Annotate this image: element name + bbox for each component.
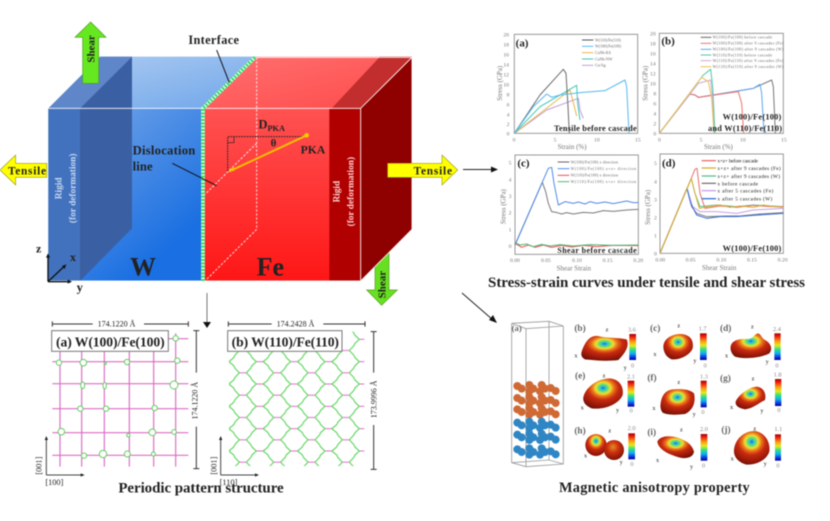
legend (a): Cu/Ag xyxy=(595,63,606,68)
anisotropy plot (b): (b) xyxy=(574,323,586,334)
legend (b): W(100)/Fe(100) after 9 cascades (Fe) xyxy=(713,41,784,46)
legend (b): W(110)/Fe(110) after 9 cascades (Fe) xyxy=(713,58,784,63)
pattern (b) W(110)/Fe(110) xyxy=(229,332,364,466)
anisotropy plot (j): x xyxy=(731,456,735,463)
arrow: tensile left: Tensile xyxy=(8,165,46,177)
anisotropy plot (d): 2.4 xyxy=(773,326,782,333)
annotation (b): W(100)/Fe(100) xyxy=(723,113,782,122)
panel label a: (a) xyxy=(512,323,522,333)
anisotropy plot (e): 2.1 xyxy=(627,373,635,380)
rigid label Fe: (for deformation) xyxy=(345,157,356,226)
curves (d) xyxy=(660,168,783,253)
tick labels (b): 14 xyxy=(650,61,656,67)
tick labels (b): 2 xyxy=(653,121,656,127)
anisotropy plot (b) xyxy=(574,323,636,371)
tick labels (a): 14 xyxy=(503,62,509,68)
panel label (d): (d) xyxy=(662,158,676,170)
label box (a): (a) W(100)/Fe(100) xyxy=(56,334,165,350)
tick labels (c): 0.10 xyxy=(572,258,582,264)
anisotropy plot (i): 2.0 xyxy=(700,426,708,433)
legend (c): W(100)/Fe(100) x+z+ direction xyxy=(571,166,636,171)
anisotropy plot (e): z xyxy=(603,372,606,379)
dimension top (b): 174.2428 Å xyxy=(277,319,315,328)
heading: magnetic anisotropy property: Magnetic anisotropy property xyxy=(559,480,750,496)
arrow: shear down: Shear xyxy=(376,271,388,298)
annotation (a): Tensile before cascade xyxy=(554,124,637,133)
x title (b): Strain (%) xyxy=(704,143,734,151)
dimension side (a) xyxy=(191,331,200,469)
pattern (a) W(100)/Fe(100) xyxy=(52,333,188,467)
anisotropy plot (b): 3.6 xyxy=(628,327,636,334)
anisotropy plot (d): 0 xyxy=(775,362,779,369)
anisotropy plot (h): 0 xyxy=(630,461,634,468)
arrow: to magnetic anisotropy xyxy=(462,293,497,323)
tick labels (b) xyxy=(650,31,787,143)
tick labels (a): 12 xyxy=(503,72,509,78)
anisotropy plot (d): x xyxy=(725,352,729,359)
annotation (b): and W(110)/Fe(110) xyxy=(708,124,782,133)
panel label (a): (a) xyxy=(516,38,529,50)
rigid label W: Rigid xyxy=(54,177,64,199)
orientation axes (a) xyxy=(35,436,85,487)
arrow: tensile left xyxy=(0,155,47,185)
axes xyz: y xyxy=(77,281,84,295)
axes xyz: x xyxy=(70,250,76,264)
anisotropy plot (h) xyxy=(574,425,636,468)
anisotropy plot (f): 0 xyxy=(701,409,705,416)
anisotropy plot (h): (h) xyxy=(574,425,586,436)
tick labels (a): 0 xyxy=(507,131,510,137)
panel: W/Fe bicrystal model xyxy=(0,22,458,305)
annotation (d): W(100)/Fe(100) xyxy=(723,244,782,253)
anisotropy plot (e): 0 xyxy=(630,408,633,415)
tick labels (c) xyxy=(509,160,643,264)
panel: periodic pattern structure xyxy=(35,319,379,497)
tick labels (a): 16 xyxy=(503,52,509,58)
orientation axes (b): [110] xyxy=(220,478,238,487)
arrow: shear up xyxy=(75,22,106,83)
tick labels (a): 18 xyxy=(503,42,509,48)
anisotropy plot (d): (d) xyxy=(720,323,731,334)
tick labels (b): 10 xyxy=(650,81,656,87)
tick labels (d): 0.15 xyxy=(747,257,757,263)
anisotropy plot (i): x xyxy=(656,457,660,464)
legend (a) xyxy=(582,37,622,68)
axes xyz xyxy=(36,241,84,295)
tick labels (d): 0 xyxy=(654,251,657,257)
tick labels (d): 1 xyxy=(654,233,657,239)
anisotropy plot (c): y xyxy=(693,358,697,365)
panel: tungsten block xyxy=(48,57,257,281)
chart (c): shear before cascade xyxy=(499,155,643,273)
tick labels (c): 4 xyxy=(509,177,512,183)
label box (b): (b) W(110)/Fe(110) xyxy=(232,334,339,350)
tick labels (c): 0 xyxy=(509,244,512,250)
anisotropy plot (d): z xyxy=(751,323,754,330)
rigid label Fe xyxy=(332,157,356,226)
interface label xyxy=(188,33,240,83)
legend (a): CuNb-KS xyxy=(595,50,611,55)
anisotropy plot (g): 0 xyxy=(777,407,781,414)
curves (a) xyxy=(514,69,629,133)
x title (d): Shear Strain xyxy=(702,264,737,272)
panel: iron block xyxy=(203,57,412,281)
tick labels (c): 3 xyxy=(509,194,512,200)
anisotropy plot (i) xyxy=(647,426,708,470)
anisotropy plot (g): 1.8 xyxy=(774,372,782,379)
tick labels (b): 18 xyxy=(650,41,656,47)
label box (b) xyxy=(228,331,342,351)
dislocation line label xyxy=(133,144,217,186)
PKA vector diagram: D xyxy=(258,118,267,132)
annotation (b) xyxy=(708,113,782,133)
box outlines xyxy=(48,57,412,281)
anisotropy plot (d) xyxy=(720,323,782,369)
tick labels (d): 0.20 xyxy=(778,257,788,263)
tick labels (b): 5 xyxy=(700,137,703,143)
orientation axes (b): [001] xyxy=(209,456,218,475)
tick labels (b): 6 xyxy=(653,101,656,107)
arrow: tensile right: Tensile xyxy=(414,165,452,177)
legend (d): x+z+ after 9 cascades (W) xyxy=(717,173,780,180)
annotation (c): Shear before cascade xyxy=(557,246,637,255)
anisotropy plot (e): (e) xyxy=(575,370,585,381)
legend (b): W(100)/Fe(100) after 9 cascades (W) xyxy=(713,47,784,52)
anisotropy plot (i): 0 xyxy=(702,462,705,469)
tick labels (b): 8 xyxy=(653,91,656,97)
anisotropy plot (j): 0 xyxy=(776,462,780,469)
y title (b): Stress (GPa) xyxy=(641,65,649,101)
anisotropy plot (e) xyxy=(575,370,635,415)
chart (d): W(100)/Fe(100) shear xyxy=(644,154,788,272)
tick labels (d): 3 xyxy=(654,197,657,203)
curves (b) xyxy=(659,69,775,133)
legend (d): x after 5 cascades (W) xyxy=(717,196,773,203)
heading: periodic pattern structure: Periodic pattern structure xyxy=(118,481,284,497)
rigid label W: (for deformation) xyxy=(67,154,78,223)
anisotropy plot (g): y xyxy=(760,408,764,415)
anisotropy plot (b): 0 xyxy=(631,362,634,369)
tick labels (c): 0.05 xyxy=(541,258,551,264)
tick labels (d): 0.00 xyxy=(655,257,665,263)
anisotropy plot (g): x xyxy=(730,404,734,411)
heading: stress-strain curves: Stress-strain curves under tensile and shear stress xyxy=(488,275,805,291)
y title (d): Stress (GPa) xyxy=(644,189,652,225)
anisotropy plot (f) xyxy=(647,373,708,418)
tick labels (a): 0 xyxy=(513,137,516,143)
atom supercell xyxy=(512,321,563,467)
dislocation line label: Dislocation xyxy=(133,144,195,158)
arrow: shear up: Shear xyxy=(86,35,98,63)
anisotropy plot (c): 0 xyxy=(704,362,707,369)
tick labels (a): 15 xyxy=(635,137,641,143)
legend (d) xyxy=(702,158,781,203)
tick labels (d): 0.05 xyxy=(686,257,696,263)
rigid label Fe: Rigid xyxy=(332,180,342,203)
anisotropy plot (i): z xyxy=(680,427,683,434)
dimension side (a): 174.1220 Å xyxy=(191,382,200,420)
tick labels (a): 8 xyxy=(507,92,510,98)
arrow: to periodic pattern xyxy=(203,293,211,328)
tick labels (d): 0.10 xyxy=(716,257,726,263)
anisotropy plot (e): x xyxy=(581,404,585,411)
anisotropy plot (f): z xyxy=(677,379,680,386)
y title (a): Stress (GPa) xyxy=(496,65,504,101)
anisotropy plot (c): z xyxy=(677,322,680,329)
chart (b): W(100)/Fe(100) and W(110)/Fe(110) xyxy=(641,31,787,151)
legend (b): W(100)/Fe(100) before cascade xyxy=(713,35,772,40)
anisotropy plot (c) xyxy=(650,322,707,369)
dimension top (a): 174.1220 Å xyxy=(98,319,136,328)
interface label: Interface xyxy=(188,33,240,47)
tick labels (c): 5 xyxy=(509,160,512,166)
interface dotted line xyxy=(203,57,255,281)
dislocation line label: line xyxy=(133,160,153,174)
anisotropy plot (c): 1.7 xyxy=(699,326,707,333)
legend (c): W(100)/Fe(100) x direction xyxy=(571,159,618,164)
anisotropy plot (j): 1.1 xyxy=(774,426,782,433)
legend (b): W(110)/Fe(110) before cascade xyxy=(713,52,772,57)
chart (a): tensile before cascade xyxy=(496,32,641,151)
anisotropy plot (e): y xyxy=(616,407,620,414)
dimension top (a) xyxy=(52,319,188,328)
tick labels (a): 20 xyxy=(503,32,509,38)
x title (a): Strain (%) xyxy=(558,143,587,151)
legend (a): CuNb-NW xyxy=(595,56,613,61)
tick labels (a): 4 xyxy=(507,112,510,118)
anisotropy plot (g) xyxy=(720,372,782,415)
tick labels (a): 6 xyxy=(507,102,510,108)
anisotropy plot (g): (g) xyxy=(720,373,731,384)
panel label (b): (b) xyxy=(661,36,675,48)
tick labels (d): 5 xyxy=(654,161,657,167)
tick labels (a) xyxy=(503,32,641,143)
tick labels (d): 4 xyxy=(654,179,657,185)
tick labels (b): 4 xyxy=(653,111,656,117)
anisotropy plot (f): (f) xyxy=(647,373,657,384)
anisotropy plot (f): 1.3 xyxy=(700,373,708,380)
axes xyz: z xyxy=(36,241,42,255)
tick labels (c): 2 xyxy=(509,211,512,217)
PKA vector diagram: PKA xyxy=(301,144,326,157)
anisotropy plot (j): z xyxy=(753,426,756,433)
anisotropy plot (f): y xyxy=(693,411,697,418)
dimension side (b): 173.9996 Å xyxy=(370,380,379,418)
legend (d): x+z+ after 9 cascades (Fe) xyxy=(717,165,781,172)
anisotropy plot (j): y xyxy=(764,461,768,468)
anisotropy plot (b): z xyxy=(606,327,609,334)
anisotropy plot (i): (i) xyxy=(647,427,656,438)
tick labels (d) xyxy=(654,161,788,263)
tick labels (b): 20 xyxy=(650,31,656,37)
anisotropy plot (h): 2.0 xyxy=(628,425,636,432)
PKA vector diagram: PKA xyxy=(267,124,285,133)
anisotropy plot (h): x xyxy=(584,453,588,460)
orientation axes (a): [100] xyxy=(45,478,64,487)
legend (d): x after 5 cascades (Fe) xyxy=(717,188,774,195)
tick labels (a): 10 xyxy=(503,82,509,88)
anisotropy plot (j): (j) xyxy=(721,425,731,436)
orientation axes (a): [001] xyxy=(35,456,44,475)
anisotropy plot (d): y xyxy=(766,358,770,365)
tick labels (c): 0.15 xyxy=(603,258,613,264)
anisotropy plot (c): x xyxy=(653,351,657,358)
arrow: to stress-strain curves xyxy=(463,166,498,172)
PKA vector diagram: θ xyxy=(271,138,277,150)
dimension side (b) xyxy=(370,332,379,469)
anisotropy plot (f): x xyxy=(652,405,656,412)
label box (a) xyxy=(52,331,168,351)
y title (c): Stress (GPa) xyxy=(499,188,507,224)
anisotropy plot (h): z xyxy=(608,427,611,434)
tick labels (a): 10 xyxy=(594,137,600,143)
orientation axes (b) xyxy=(209,436,259,487)
x title (c): Shear Strain xyxy=(557,265,592,273)
anisotropy plot (b): x xyxy=(574,352,578,359)
tick labels (a): 5 xyxy=(554,137,557,143)
panel label (c): (c) xyxy=(517,158,530,170)
arrow: shear down xyxy=(367,253,397,305)
anisotropy plot (b): y xyxy=(624,364,628,371)
anisotropy plot (g): z xyxy=(752,376,755,383)
tick labels (c): 0.20 xyxy=(633,258,643,264)
tick labels (b): 12 xyxy=(650,71,656,77)
tick labels (b): 10 xyxy=(740,137,746,143)
dimension top (b) xyxy=(228,319,365,328)
legend (d): x+z+ before cascade xyxy=(717,158,759,165)
legend (c): W(110)/Fe(100) x+z+ direction xyxy=(571,179,636,184)
curves (c) xyxy=(515,167,638,247)
tick labels (c): 0.00 xyxy=(510,258,520,264)
label W: W xyxy=(130,253,156,282)
legend (c): W(110)/Fe(100) x direction xyxy=(571,173,618,178)
anisotropy plot (c): (c) xyxy=(650,323,660,334)
legend (b) xyxy=(701,35,784,69)
label Fe: Fe xyxy=(257,253,284,282)
panel: magnetic anisotropy xyxy=(512,321,782,496)
tick labels (b): 15 xyxy=(781,137,787,143)
tick labels (d): 2 xyxy=(654,216,657,222)
tick labels (b): 16 xyxy=(650,51,656,57)
legend (c) xyxy=(558,159,636,184)
tick labels (b): 0 xyxy=(658,137,661,143)
tick labels (a): 2 xyxy=(507,122,510,128)
legend (a): W(100)/Fe(100) xyxy=(595,44,622,49)
tick labels (c): 1 xyxy=(509,227,512,233)
rigid label W xyxy=(54,154,78,223)
anisotropy plot (h): y xyxy=(620,459,624,466)
anisotropy plot (i): y xyxy=(690,463,694,470)
legend (a): W(110)/Fe(110) xyxy=(595,37,621,42)
arrow: tensile right xyxy=(388,155,458,185)
legend (b): W(110)/Fe(110) after 9 cascades (W) xyxy=(713,64,784,69)
tick labels (b): 0 xyxy=(653,131,656,137)
legend (d): x before cascade xyxy=(717,180,759,187)
anisotropy plot (j) xyxy=(721,425,782,469)
PKA vector diagram xyxy=(227,118,326,172)
